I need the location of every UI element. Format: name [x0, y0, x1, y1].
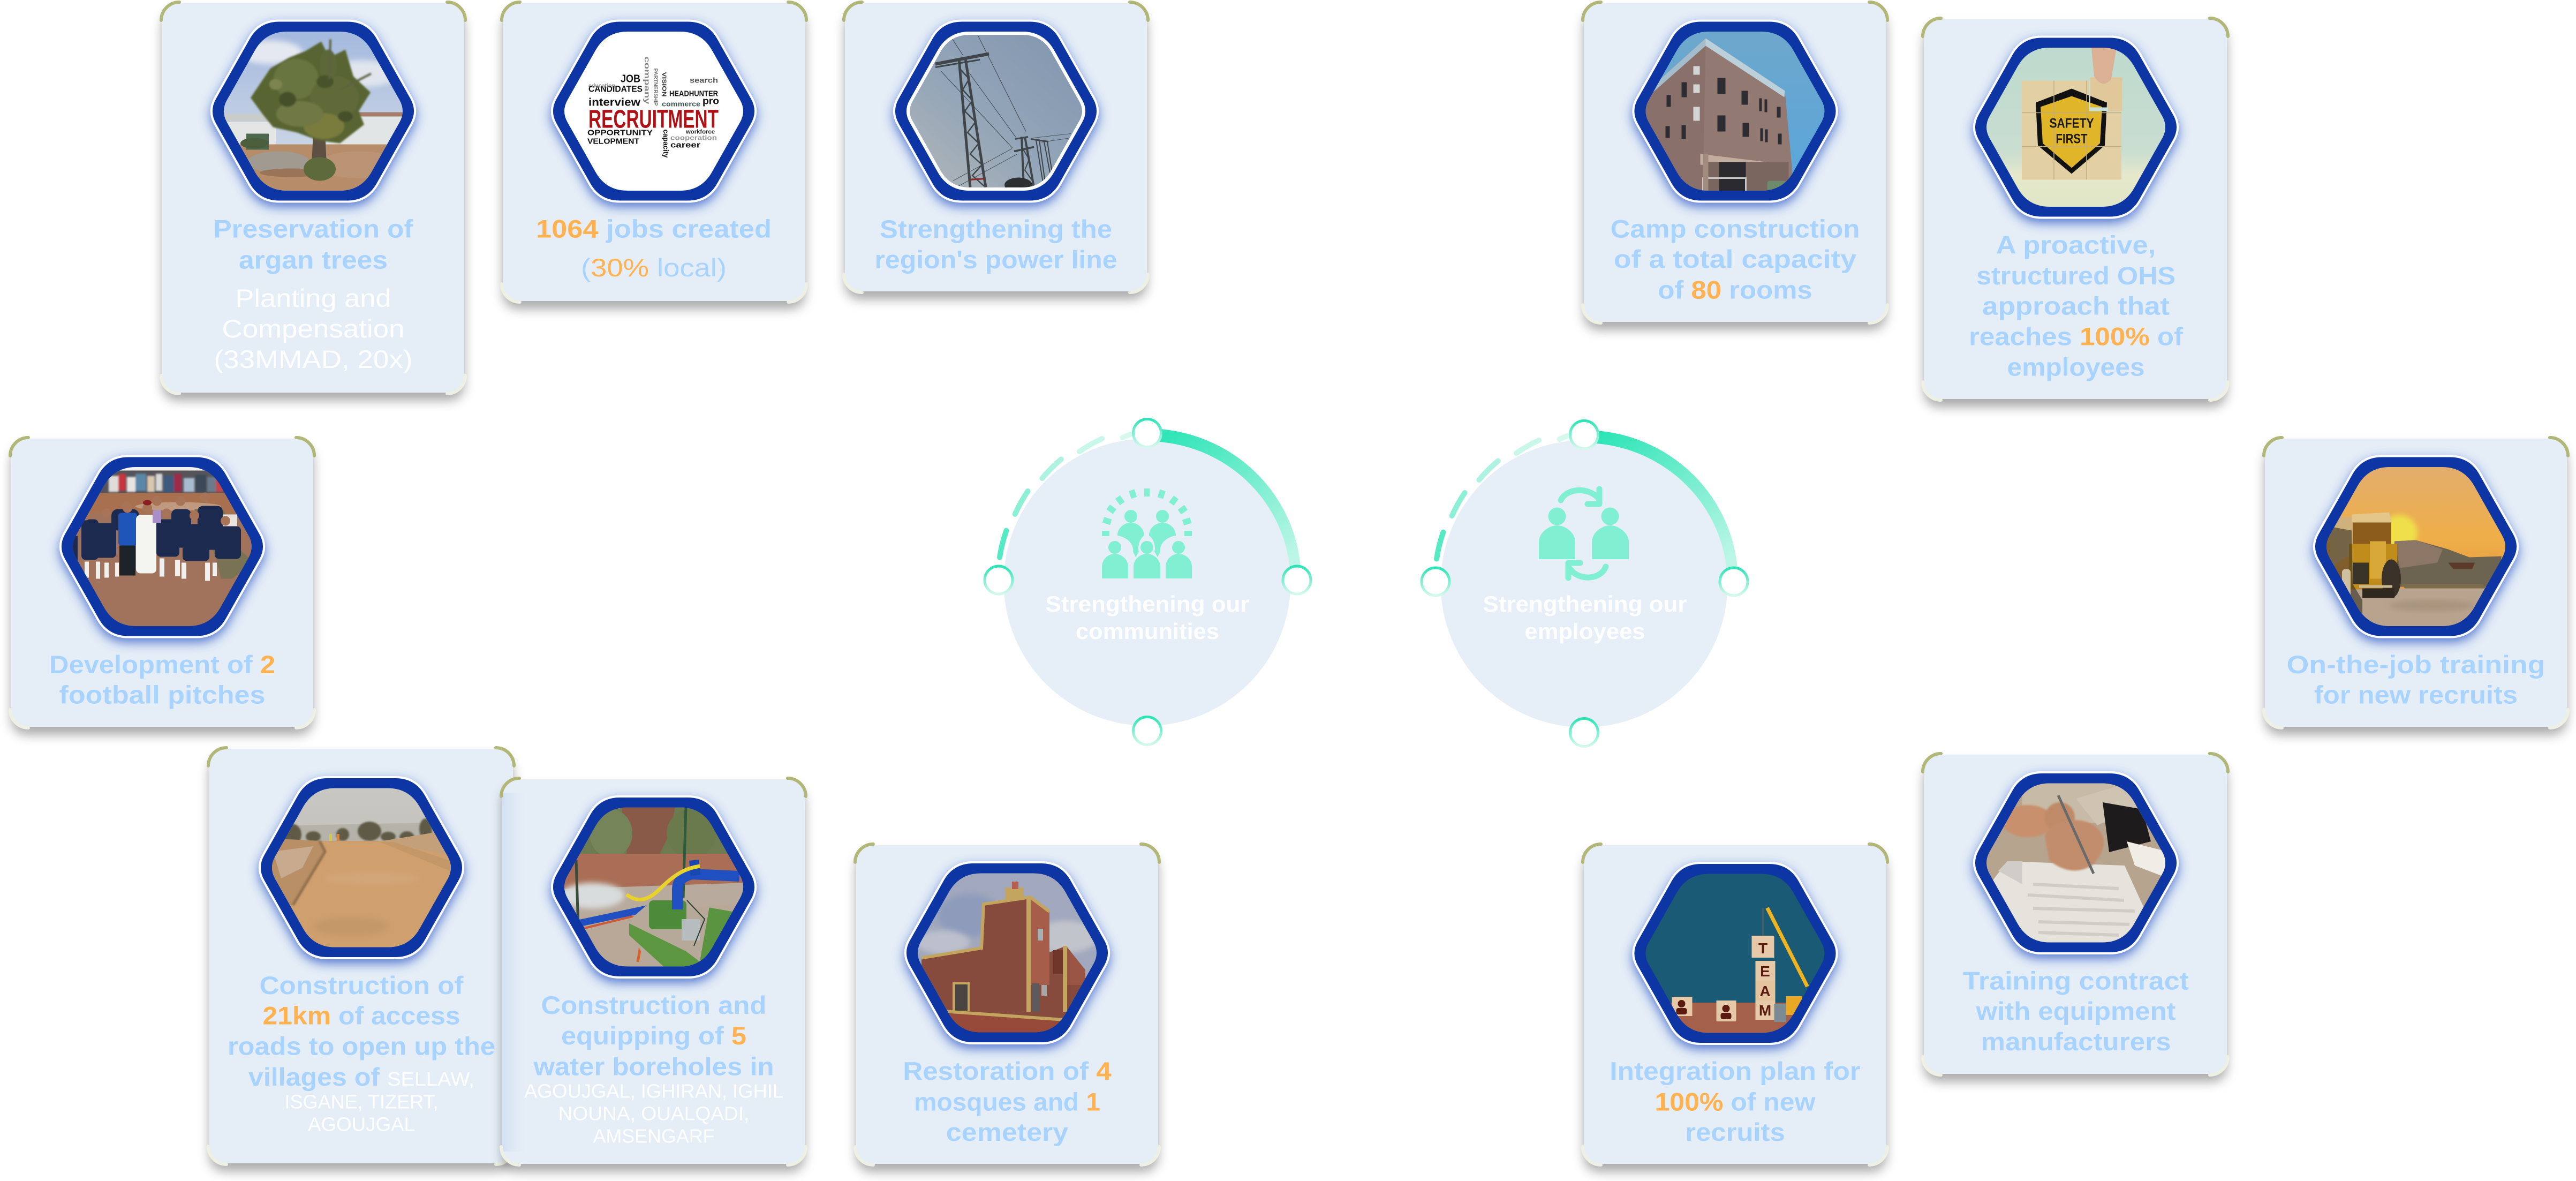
photo: recruitment word cloud: RECRUITMENT	[588, 105, 719, 134]
panel: access roads	[208, 748, 514, 1164]
text: 1064 jobs created: (30% local)	[581, 253, 727, 282]
text: integration plan: Integration plan for	[1610, 1057, 1861, 1085]
text: 1064 jobs created: 1064 jobs created	[536, 214, 772, 243]
heading: strengthening our communities: communities	[1076, 619, 1219, 644]
panel: OHS approach	[1923, 18, 2228, 400]
photo: argan tree	[211, 20, 415, 201]
heading: strengthening our communities: Strengthening our	[1045, 591, 1250, 616]
text: preservation of argan trees: argan trees	[239, 245, 388, 274]
panel: integration plan	[1583, 844, 1887, 1165]
panel: water boreholes	[501, 778, 806, 1165]
photo: team blocks and crane: T	[1758, 940, 1767, 957]
panel: jobs created	[502, 2, 806, 302]
photo: safety first blocks	[1974, 36, 2178, 217]
text: training contract: Training contract	[1963, 966, 2189, 995]
photo: recruitment word cloud: PARTNERSHIP	[652, 69, 659, 106]
photo: recruitment word cloud: company	[643, 57, 652, 104]
text: camp construction capacity: of a total capacity	[1614, 245, 1856, 273]
photo: recruitment word cloud: OPPORTUNITY	[587, 129, 653, 137]
text: integration plan	[1610, 1057, 1861, 1146]
photo: safety first blocks: FIRST	[2056, 132, 2087, 147]
text: construction of access roads: villages of SELLAW,	[248, 1063, 474, 1091]
photo: signing a contract	[1974, 772, 2178, 953]
heading: strengthening our communities	[1045, 591, 1250, 644]
photo: camp building	[1633, 20, 1837, 201]
text: construction of access roads	[228, 971, 495, 1135]
panel: football pitches	[10, 438, 314, 728]
text: 1064 jobs created	[536, 214, 772, 282]
text: preservation of argan trees	[213, 214, 413, 373]
text: training contract: manufacturers	[1981, 1027, 2171, 1056]
photo: football team	[61, 456, 264, 637]
text: camp construction capacity	[1611, 214, 1860, 304]
text: proactive OHS approach: A proactive,	[1996, 230, 2156, 259]
heading: strengthening our employees: employees	[1525, 619, 1645, 644]
text: construction of access roads: roads to open up the	[228, 1032, 495, 1060]
text: proactive OHS approach	[1969, 230, 2183, 381]
text: preservation of argan trees: Preservation of	[213, 214, 413, 243]
photo: mining truck at sunset	[2314, 456, 2518, 637]
heading: strengthening our employees	[1483, 591, 1687, 644]
photo: recruitment word cloud: pro	[702, 95, 719, 106]
photo: recruitment word cloud: JOB	[621, 73, 640, 85]
text: construction of access roads: AGOUJGAL	[308, 1113, 415, 1135]
text: strengthening the power line: region's power line	[875, 245, 1117, 274]
text: proactive OHS approach: employees	[2007, 352, 2145, 381]
text: camp construction capacity: of 80 rooms	[1658, 275, 1812, 304]
text: camp construction capacity: Camp construction	[1611, 214, 1860, 243]
text: restoration of mosques and cemetery	[903, 1057, 1112, 1146]
photo: recruitment word cloud: VISION	[661, 72, 667, 97]
text: restoration of mosques and cemetery: cemetery	[946, 1118, 1068, 1146]
text: development of 2 football pitches	[49, 650, 275, 709]
photo: recruitment word cloud: capacity	[662, 130, 670, 158]
photo: recruitment word cloud	[552, 20, 756, 201]
panel: centre circle communities	[985, 419, 1311, 744]
text: development of 2 football pitches: Development of 2	[49, 650, 275, 679]
text: integration plan: 100% of new	[1655, 1087, 1816, 1116]
text: strengthening the power line	[875, 215, 1117, 274]
text: construction of access roads: 21km of access	[262, 1002, 460, 1029]
photo: power line pylons	[894, 20, 1098, 201]
panel: on-the-job training	[2264, 438, 2568, 728]
photo: recruitment word cloud: education	[588, 82, 615, 89]
panel: argan trees	[161, 2, 465, 394]
text: construction of water boreholes: water boreholes in	[533, 1052, 774, 1081]
photo: recruitment word cloud: search	[690, 76, 718, 85]
text: training contract: with equipment	[1975, 997, 2176, 1025]
text: construction of access roads: ISGANE, TIZERT,	[285, 1090, 438, 1113]
panel: centre circle employees	[1422, 421, 1748, 747]
text: proactive OHS approach: approach that	[1982, 291, 2170, 320]
photo: team blocks and crane: E	[1760, 963, 1770, 980]
photo: team blocks and crane	[1633, 863, 1837, 1044]
text: preservation of argan trees: Planting and	[236, 284, 391, 312]
photo: restored mosque	[905, 862, 1109, 1043]
text: preservation of argan trees: Compensation	[222, 314, 405, 343]
text: restoration of mosques and cemetery: Restoration of 4	[903, 1057, 1112, 1085]
photo: team blocks and crane: A	[1759, 983, 1771, 999]
heading: strengthening our employees: Strengthening our	[1483, 591, 1687, 616]
text: strengthening the power line: Strengthening the	[880, 215, 1112, 243]
text: proactive OHS approach: reaches 100% of	[1969, 322, 2183, 350]
photo: recruitment word cloud: CANDIDATES	[588, 84, 643, 94]
text: on-the-job training: On-the-job training	[2286, 650, 2545, 679]
photo: safety first blocks: SAFETY	[2050, 116, 2094, 131]
panel: training contract	[1923, 754, 2228, 1075]
photo: recruitment word cloud: workforce	[685, 129, 715, 135]
text: on-the-job training: for new recruits	[2314, 680, 2518, 709]
photo: recruitment word cloud: interview	[588, 96, 640, 108]
text: construction of water boreholes: NOUNA, OUALQADI,	[558, 1102, 750, 1125]
text: on-the-job training	[2286, 650, 2545, 709]
text: preservation of argan trees: (33MMAD, 20x)	[214, 345, 412, 373]
photo: recruitment word cloud: cooperation	[670, 134, 717, 141]
photo: recruitment word cloud: commerce	[662, 100, 700, 108]
text: construction of water boreholes: Construction and	[541, 991, 767, 1019]
text: integration plan: recruits	[1685, 1118, 1785, 1146]
photo: team blocks and crane: M	[1759, 1002, 1771, 1019]
text: construction of water boreholes: AGOUJGAL, IGHIRAN, IGHIL	[524, 1080, 783, 1102]
icon: employees exchange	[1539, 489, 1629, 578]
photo: recruitment word cloud: VELOPMENT	[587, 137, 639, 146]
text: training contract	[1963, 966, 2189, 1056]
panel: mosques and cemetery	[855, 844, 1159, 1165]
photo: recruitment word cloud: HEADHUNTER	[669, 89, 718, 99]
panel: power line	[844, 2, 1148, 292]
photo: recruitment word cloud: career	[670, 140, 700, 150]
photo: borehole pump	[552, 796, 756, 977]
panel: camp construction	[1583, 2, 1887, 323]
photo: dirt road	[260, 777, 463, 958]
text: proactive OHS approach: structured OHS	[1976, 261, 2175, 290]
text: construction of access roads: Construction of	[259, 971, 464, 999]
text: construction of water boreholes	[524, 991, 783, 1147]
text: development of 2 football pitches: football pitches	[59, 680, 266, 709]
text: construction of water boreholes: equipping of 5	[561, 1021, 746, 1050]
text: restoration of mosques and cemetery: mosques and 1	[914, 1087, 1100, 1116]
text: construction of water boreholes: AMSENGARF	[593, 1125, 714, 1147]
icon: community people	[1102, 488, 1192, 578]
